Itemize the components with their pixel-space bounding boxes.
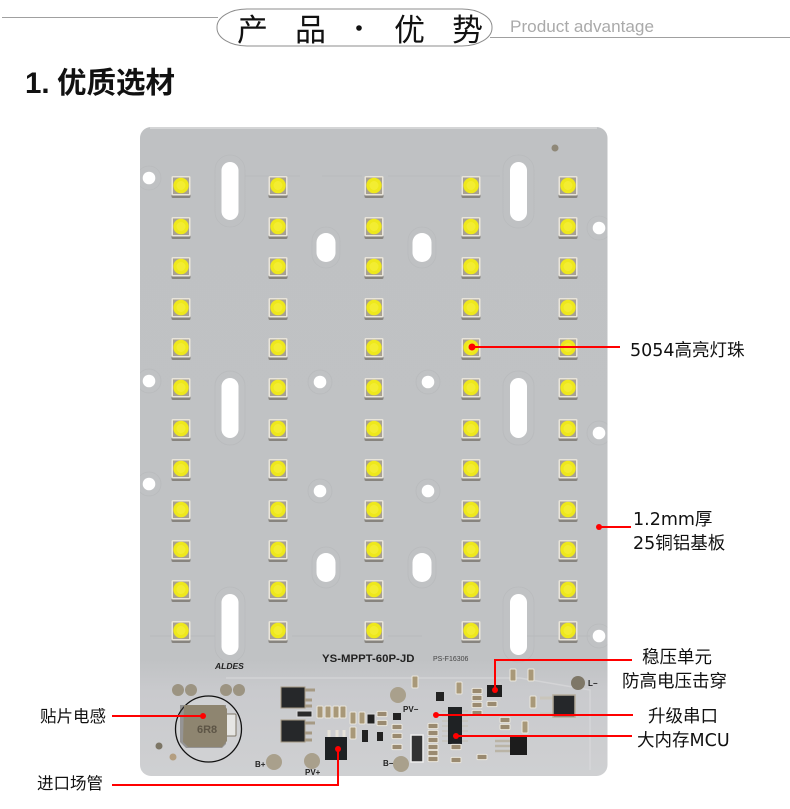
callout: regulator: 稳压单元 [642, 648, 712, 668]
LED array [172, 176, 578, 643]
inductor: 6R8 [197, 724, 217, 736]
callout: substrate: 1.2mm厚 [633, 510, 712, 530]
callout: substrate [596, 510, 725, 554]
header title: 势 [452, 5, 483, 50]
callout: input MOSFET: 进口场管 [37, 774, 103, 793]
header title: 产 [237, 5, 268, 50]
board silkscreen text: ALDES [214, 661, 244, 671]
header capsule [217, 9, 492, 46]
board silkscreen text [214, 653, 598, 777]
callout: MCU: 大内存MCU [637, 731, 730, 751]
callout: regulator: 防高电压击穿 [622, 672, 727, 692]
section heading: 1. [25, 67, 50, 100]
board silkscreen text: PV− [403, 705, 419, 714]
board silkscreen text: YS-MPPT-60P-JD [322, 653, 414, 665]
callout: input MOSFET [37, 746, 341, 793]
board silkscreen text: B− [383, 759, 394, 768]
small SMD parts [317, 669, 536, 763]
callout: regulator [492, 648, 727, 693]
header dot [356, 25, 362, 31]
MOSFETs and ICs [281, 682, 575, 762]
callout: serial port: 升级串口 [648, 707, 718, 727]
callout: LED beads [468, 341, 745, 361]
header title: 品 [295, 5, 326, 50]
section heading: 优质选材 [57, 67, 175, 100]
callout: inductor: 贴片电感 [40, 707, 106, 726]
callout: LED beads: 5054高亮灯珠 [630, 341, 745, 361]
slots and mounting holes [143, 162, 605, 655]
callout: serial port [433, 707, 718, 727]
board silkscreen text: L− [588, 679, 598, 688]
callout: inductor [40, 707, 206, 726]
header title: 优 [394, 5, 425, 50]
board silkscreen text: B+ [255, 760, 266, 769]
inductor [176, 696, 242, 762]
callout: substrate: 25铜铝基板 [633, 534, 725, 554]
board silkscreen text: PS-F16306 [433, 656, 469, 663]
header english subtitle: Product advantage [510, 17, 654, 36]
board plate [140, 127, 608, 776]
panel: PCB board [137, 127, 611, 777]
callout: MCU [453, 731, 730, 751]
solder pads [156, 676, 585, 772]
hole halos [137, 155, 611, 662]
header banner [2, 5, 790, 50]
board silkscreen text: PV+ [305, 768, 321, 777]
